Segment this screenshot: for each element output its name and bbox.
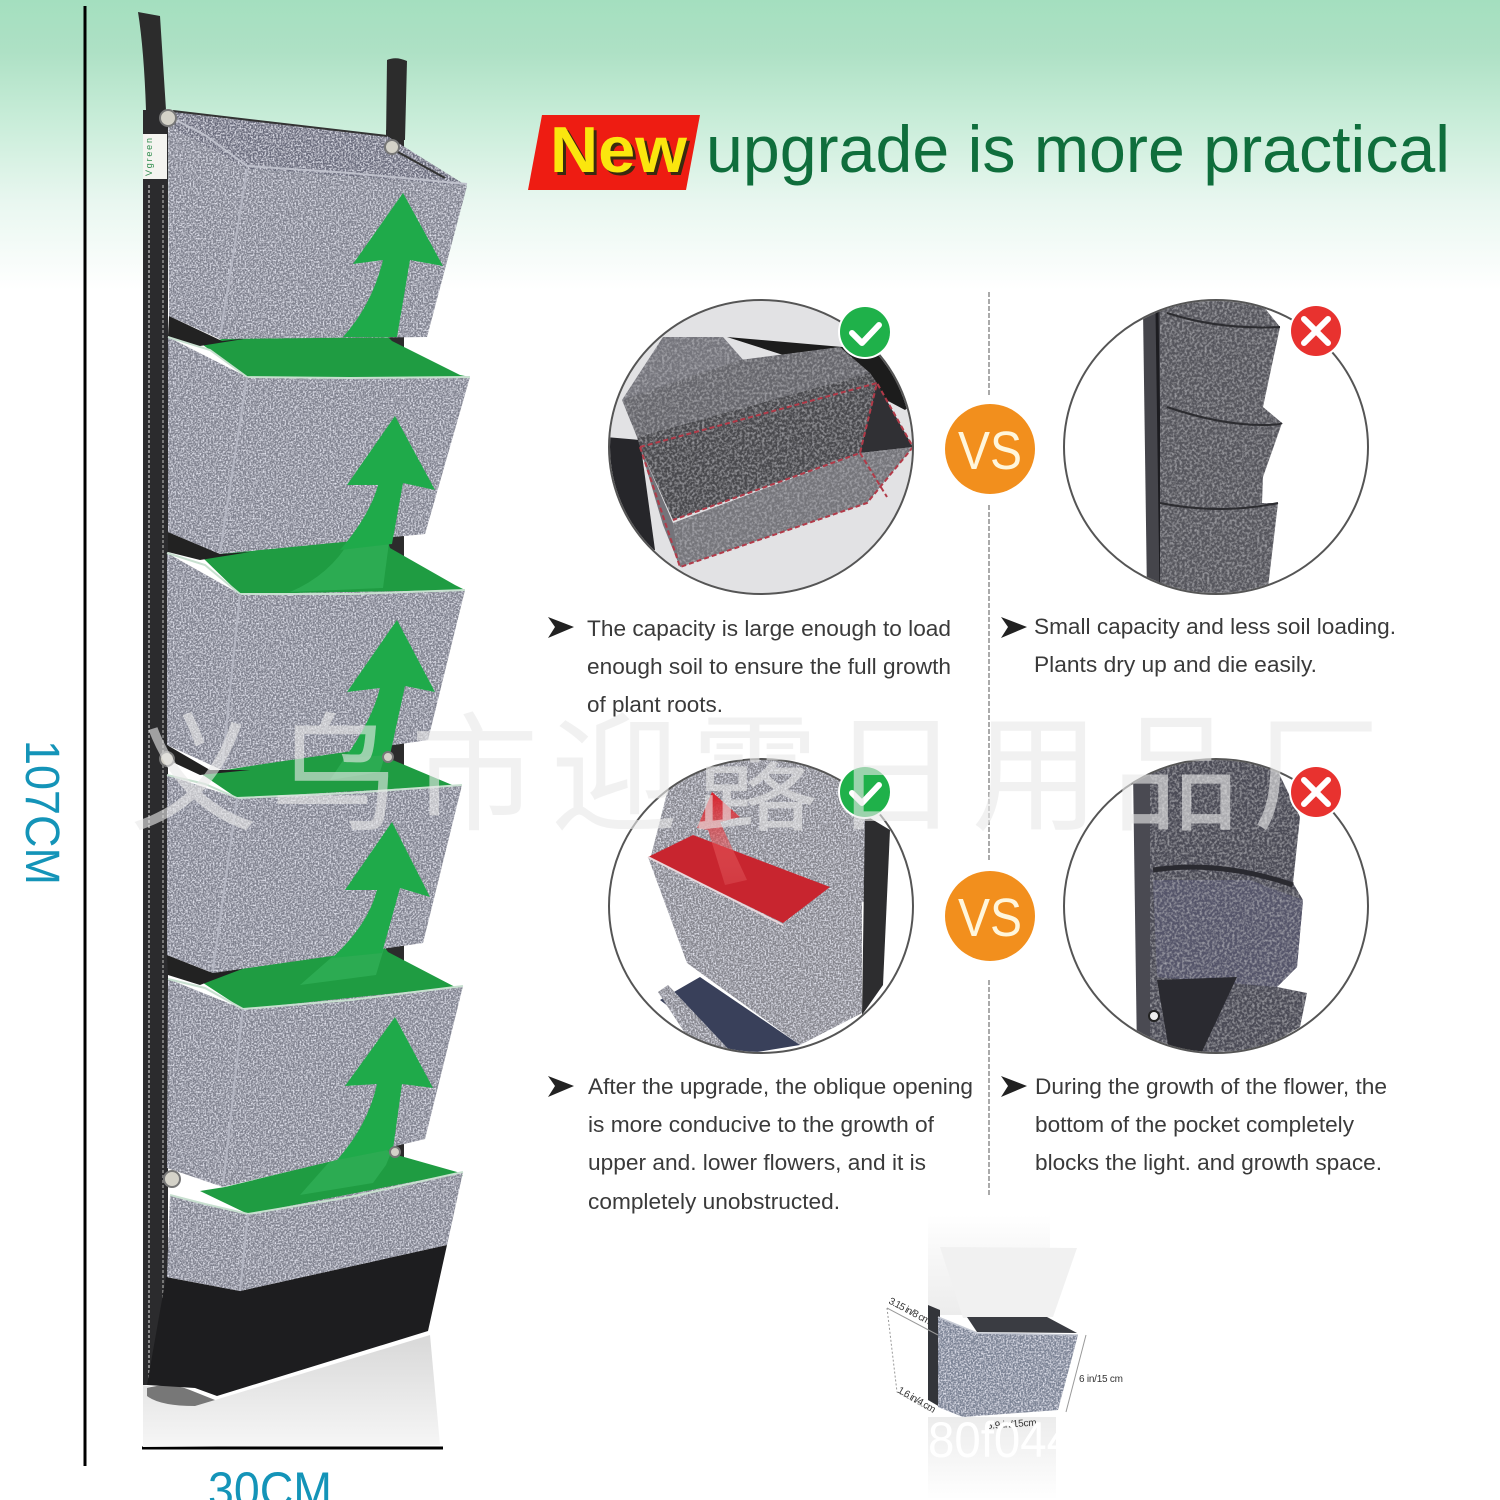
circle outline [609,300,913,594]
text: blocks light: blocks the light. and growth space. [1035,1150,1382,1175]
VS badge 2: VS [958,888,1022,948]
dashed center divider [988,292,990,1197]
bullet arrow [548,1076,574,1097]
bullet arrow [548,617,574,638]
arrow tail in pocket 4 [330,745,388,780]
New badge: New [550,113,687,186]
comparison 1: good pocket photo [600,295,920,600]
comparison 1: bad pocket photo [1064,296,1368,596]
icon: check badge [838,765,892,819]
text: oblique opening: completely unobstructed. [588,1189,840,1214]
height dimension line [84,6,86,1466]
arrow tail in pocket 6 [300,1148,393,1195]
text: small capacity: Small capacity and less soil loading. [1034,614,1396,639]
bullet arrow [1001,617,1027,638]
VS badge 2 [945,871,1035,961]
height label: 107CM [15,740,68,885]
title text: upgrade is more practical [706,112,1450,186]
text: blocks light: bottom of the pocket completely [1035,1112,1354,1137]
green arrow 3 [345,620,435,758]
text: blocks light: During the growth of the flower, the [1035,1074,1387,1099]
watermark: 义乌市迎露日用品厂 [130,672,1380,857]
VS badge 1: VS [958,421,1022,481]
dimension: width: 5.9 in/15cm [986,1418,1037,1432]
right backing strip [386,130,404,1170]
width dimension line [142,1446,443,1450]
pocket 5 [167,945,463,1187]
backing strip [928,1305,940,1407]
pocket interior [967,1317,1077,1333]
text: capacity: enough soil to ensure the full growth [587,654,951,679]
green arrow 5 [337,1017,433,1160]
green arrow 2 [340,416,435,550]
hanging straps [138,12,407,140]
text: oblique opening: is more conducive to the growth of [588,1112,935,1137]
pocket seams [938,1317,1078,1335]
background gradient [0,0,1500,290]
floor reflection [143,1335,440,1447]
VS badge 1 [945,404,1035,494]
pocket 6 with black base [147,1148,463,1396]
text: capacity: The capacity is large enough to load [587,616,951,641]
icon: check badge [838,305,892,359]
dimension lines [887,1308,1086,1412]
watermark id: 80f044 [928,1412,1073,1468]
pocket 2 [168,336,470,560]
comparison 2: good pocket photo [609,750,913,1056]
circle outline [1064,300,1368,594]
circle outline [1064,759,1368,1053]
arrow tail in pocket 3 [290,535,390,592]
text: blocks light [1035,1074,1387,1175]
floor shadow [147,1385,215,1406]
text: capacity [587,616,951,717]
text: oblique opening: After the upgrade, the oblique opening [588,1074,973,1099]
pocket 1 [168,111,467,346]
label tag [143,134,167,179]
grommets [160,110,400,1187]
left backing strip [143,110,168,1385]
dimension: height: 6 in/15 cm [1079,1374,1123,1385]
dimension: depth top: 3.15 in/8 cm [887,1296,932,1327]
faded reflection [928,1417,1056,1500]
text: capacity: of plant roots. [587,692,723,717]
pocket 4 [167,745,462,985]
pocket size diagram [886,1247,1122,1464]
green arrow 1 [343,193,443,337]
pocket 3 [167,533,465,775]
comparison 2: bad pocket photo [1064,755,1368,1056]
label tag: Vgreen [144,138,154,176]
icon: cross badge [1289,304,1343,358]
text: small capacity [1034,614,1396,677]
arrow tail in pocket 5 [300,945,385,985]
product: wall-hanging planter [138,12,470,1447]
pocket front [938,1317,1078,1417]
faded top pocket [928,1215,1077,1318]
green arrow 4 [332,822,430,958]
text: small capacity: Plants dry up and die easily. [1034,652,1317,677]
circle outline [609,759,913,1053]
bullet arrow [1001,1076,1027,1097]
icon: cross badge [1289,765,1343,819]
dimension: depth bottom: 1.6 in/4 cm [896,1385,937,1416]
text: oblique opening [588,1074,973,1214]
red arrow [697,792,747,885]
New badge: New [553,116,690,189]
title [528,112,1450,190]
text: oblique opening: upper and. lower flowers, and it is [588,1150,926,1175]
